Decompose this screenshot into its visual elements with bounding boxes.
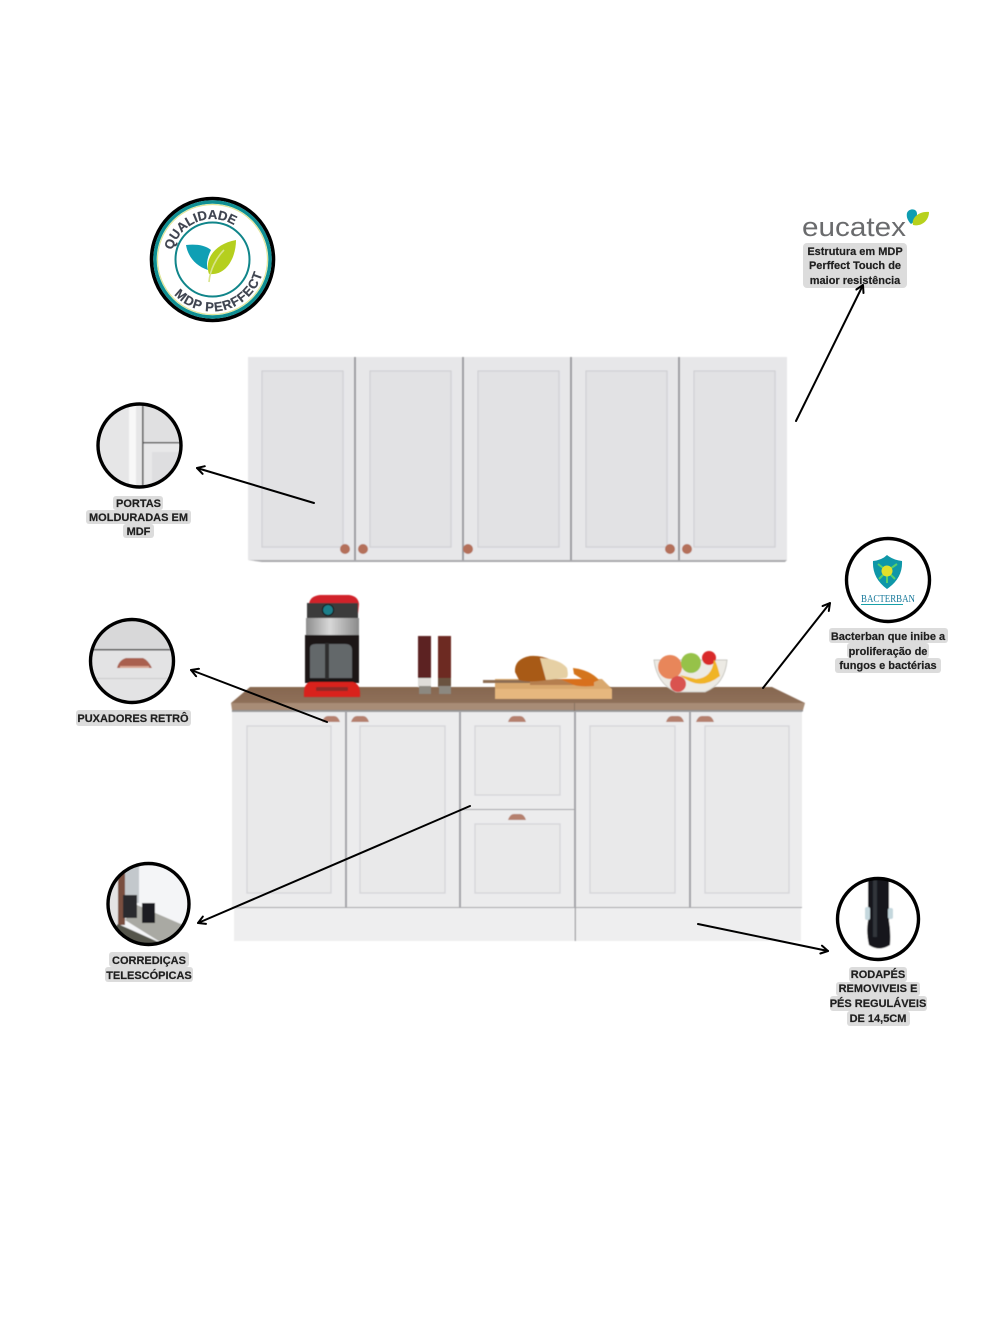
handles [322, 716, 714, 820]
door 3 [576, 712, 689, 907]
arrow: rodapes [698, 924, 828, 951]
fruit bowl [654, 651, 727, 692]
pepper mills [418, 636, 451, 694]
door 4 [572, 357, 678, 560]
label: TELESCÓPICAS [106, 969, 192, 982]
callout: corredicas telescopicas [105, 863, 193, 982]
arrow: puxadores [191, 670, 327, 722]
arrow: eucatex [796, 285, 863, 421]
label: RODAPÉS [851, 968, 905, 981]
door 5 [680, 357, 787, 560]
base cabinet [232, 711, 802, 941]
callout: rodapes [830, 877, 927, 1026]
door 1 [248, 357, 354, 560]
drawer 2 [461, 810, 574, 907]
label: fungos e bactérias [839, 660, 937, 672]
label: PUXADORES RETRÔ [77, 712, 189, 725]
plinth [234, 907, 801, 941]
door 4 [691, 712, 802, 907]
label: PORTAS [116, 498, 161, 510]
logo: eucatex with label: maior resistência [810, 275, 901, 287]
callout: puxadores retro [76, 618, 191, 726]
label [105, 952, 193, 982]
label: MDF [127, 526, 151, 538]
label: MOLDURADAS EM [89, 512, 188, 524]
label: DE 14,5CM [850, 1013, 906, 1025]
door 3 [464, 357, 570, 560]
badge: Qualidade MDP Perffect: QUALIDADE [165, 210, 238, 249]
arrow: corredicas [198, 806, 470, 923]
callout: portas molduradas [86, 403, 191, 538]
badge: Qualidade MDP Perffect: MDP PERFFECT [174, 270, 262, 312]
label: REMOVIVEIS E [839, 983, 917, 995]
label: CORREDIÇAS [112, 955, 186, 967]
label [86, 496, 191, 538]
countertop [231, 687, 805, 712]
knobs [340, 544, 692, 554]
label: proliferação de [849, 646, 927, 658]
icon: adjustable foot [837, 877, 919, 961]
logo: eucatex with label: eucatex [802, 212, 907, 242]
label: Bacterban que inibe a [831, 631, 946, 643]
drawer 1 [461, 712, 574, 809]
bread on cutting board [483, 656, 612, 699]
icon: handle detail [90, 618, 174, 703]
door 2 [347, 712, 459, 907]
upper cabinet [248, 357, 787, 562]
icon: bacterban logo: BACTERBAN [861, 594, 915, 605]
label: PÉS REGULÁVEIS [830, 997, 926, 1010]
icon: molding detail [97, 403, 182, 488]
label [830, 967, 927, 1026]
icon: telescopic slide [107, 863, 191, 947]
label [829, 628, 948, 673]
logo: eucatex with label [802, 209, 929, 288]
door 1 [232, 712, 345, 907]
callout: bacterban [829, 538, 948, 673]
arrow: portas [197, 468, 314, 503]
badge: Qualidade MDP Perffect [150, 196, 276, 322]
arrow: bacterban [763, 603, 830, 688]
door 2 [356, 357, 462, 560]
logo: eucatex with label: Estrutura em MDP [807, 246, 903, 258]
logo: eucatex with label: Perffect Touch de [809, 260, 901, 272]
coffee maker [304, 595, 360, 697]
